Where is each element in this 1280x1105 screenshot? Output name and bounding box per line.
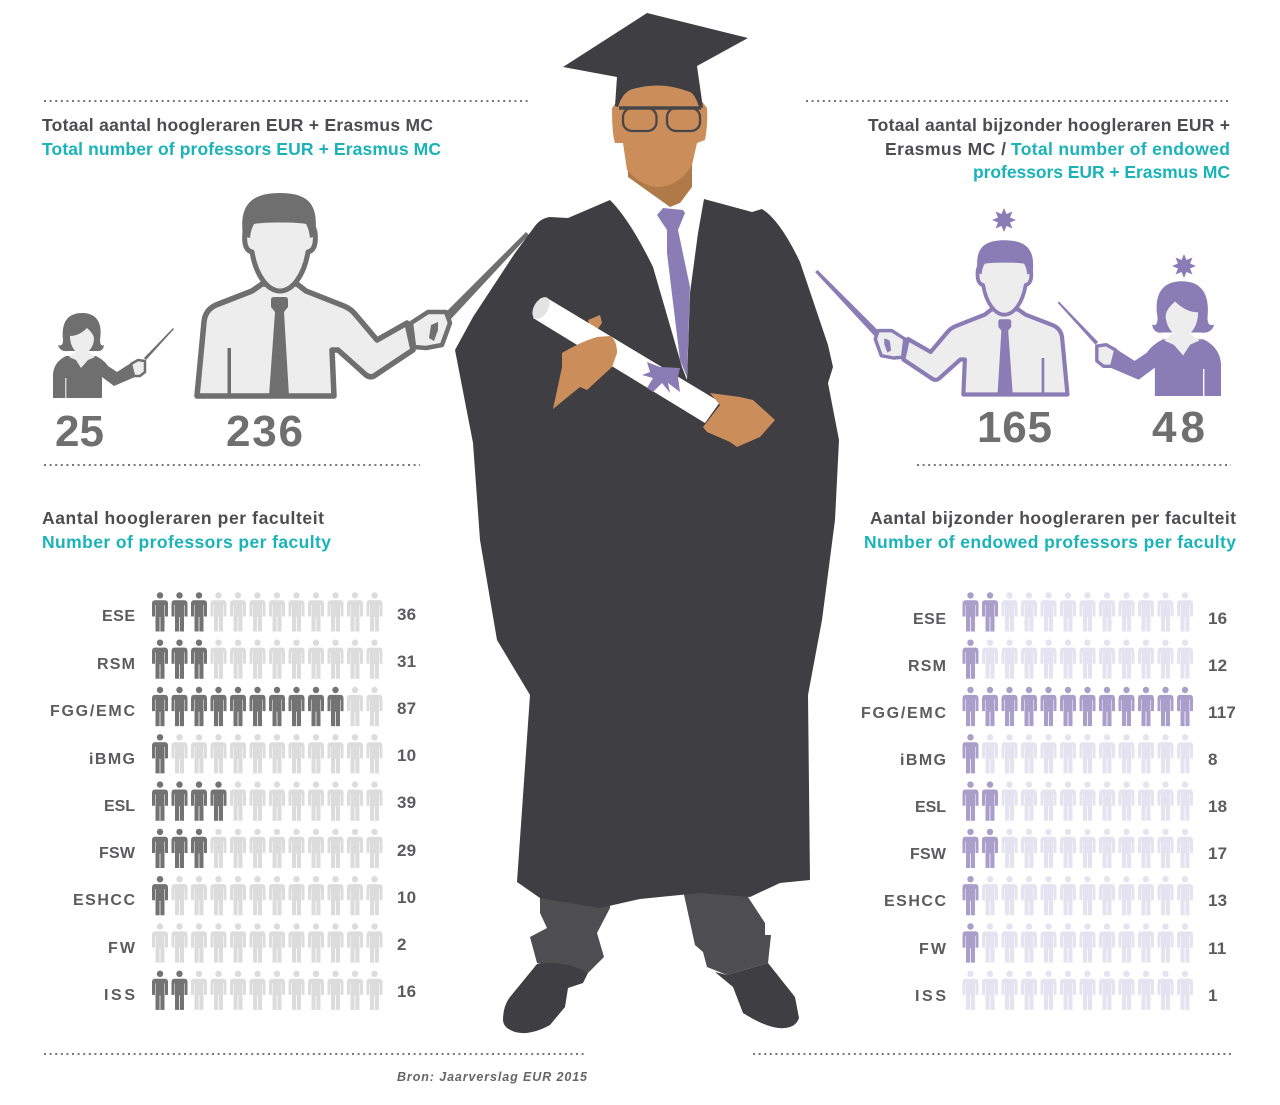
row: ESHCC 10 (73, 876, 416, 915)
row: ESE 16: ESE (913, 611, 946, 628)
row: iBMG 8 (900, 734, 1218, 773)
chart: endowed professors per faculty (861, 592, 1236, 1010)
row: FSW 29: 29 (397, 841, 416, 860)
row: ISS 16: ISS (104, 987, 135, 1004)
row: ISS 1: 1 (1208, 986, 1218, 1005)
row: ESL 39 (104, 781, 416, 821)
row: ESE 36: ESE (102, 608, 135, 625)
row: iBMG 10 (89, 734, 416, 773)
row: ESE 36: 36 (397, 605, 416, 624)
icon: male endowed professor, purple (815, 208, 1067, 394)
number: 236: 236 (226, 407, 303, 456)
row: RSM 12: RSM (908, 658, 946, 675)
row: FSW 17 (910, 829, 1227, 868)
row: FW 11: 11 (1208, 939, 1226, 958)
row: ESHCC 10: ESHCC (73, 892, 135, 909)
heading: endowed professors per faculty (864, 508, 1236, 552)
row: FW 2 (108, 923, 407, 963)
row: FGG/EMC 87: FGG/EMC (50, 703, 135, 720)
icon: female professor, grey (53, 313, 174, 398)
row: ISS 16: 16 (397, 982, 416, 1001)
row: ESE 16: 16 (1208, 609, 1227, 628)
row: ISS 1 (915, 971, 1218, 1010)
heading: endowed professors per faculty: Number of endowed professors per faculty (864, 532, 1236, 552)
row: FSW 17: FSW (910, 846, 947, 863)
mortarboard cap (563, 13, 748, 108)
number: 165: 165 (977, 403, 1052, 452)
shoes (503, 963, 799, 1033)
hands (553, 336, 775, 447)
row: FW 2: FW (108, 940, 136, 957)
row: FGG/EMC 117 (861, 687, 1236, 726)
row: FSW 29: FSW (99, 845, 136, 862)
row: FGG/EMC 87: 87 (397, 699, 416, 718)
row: RSM 12: 12 (1208, 656, 1227, 675)
row: RSM 31: RSM (97, 656, 135, 673)
heading: total endowed professors (868, 115, 1230, 182)
row: ESHCC 10: 10 (397, 888, 416, 907)
row: FGG/EMC 117: FGG/EMC (861, 705, 946, 722)
row: RSM 12 (908, 640, 1227, 679)
tie (657, 208, 690, 377)
row: RSM 31 (97, 640, 416, 679)
row: ESL 39: ESL (104, 798, 135, 815)
row: FW 2: 2 (397, 935, 407, 954)
row: iBMG 8: 8 (1208, 750, 1218, 769)
row: FGG/EMC 117: 117 (1208, 703, 1236, 722)
heading: total endowed professors: professors EUR + Erasmus MC (973, 162, 1230, 182)
heading: total professors: Totaal aantal hoogleraren EUR + Erasmus MC (42, 115, 433, 135)
row: ISS 1: ISS (915, 988, 946, 1005)
trousers (530, 890, 771, 975)
heading: total endowed professors: Erasmus MC / (885, 139, 1006, 159)
ribbon (642, 362, 680, 393)
row: FW 11: FW (919, 941, 947, 958)
left hand fingers (588, 315, 602, 330)
heading: total professors: Total number of professors EUR + Erasmus MC (42, 139, 441, 159)
heading: professors per faculty: Number of professors per faculty (42, 532, 331, 552)
chart: professors per faculty (50, 592, 416, 1010)
row: FW 11 (919, 923, 1226, 963)
row: RSM 31: 31 (397, 652, 416, 671)
number: 48: 48 (1152, 403, 1205, 452)
heading: professors per faculty: Aantal hoogleraren per faculteit (42, 508, 324, 528)
icon: female endowed professor, purple (1058, 254, 1221, 396)
number: 25: 25 (55, 407, 104, 456)
row: ESL 18: ESL (915, 799, 946, 816)
row: iBMG 10: 10 (397, 746, 416, 765)
row: ESHCC 13: ESHCC (884, 893, 946, 910)
heading: total endowed professors: Total number of endowed (1011, 139, 1230, 159)
neck and face (628, 150, 692, 207)
row: ESE 36 (102, 592, 416, 632)
row: ISS 16 (104, 971, 416, 1010)
row: ESHCC 13 (884, 876, 1227, 915)
row: iBMG 8: iBMG (900, 752, 946, 769)
source note: Bron: Jaarverslag EUR 2015 (397, 1070, 588, 1084)
row: FSW 29 (99, 829, 416, 868)
row: ESL 18: 18 (1208, 797, 1227, 816)
heading: professors per faculty (42, 508, 331, 552)
icon: male professor, grey (197, 193, 529, 396)
row: FSW 17: 17 (1208, 844, 1227, 863)
diploma roll (533, 298, 720, 423)
central graduate figure (455, 13, 839, 1033)
row: ESL 18 (915, 781, 1227, 821)
row: FGG/EMC 87 (50, 687, 416, 726)
row: ESHCC 13: 13 (1208, 891, 1227, 910)
row: iBMG 10: iBMG (89, 751, 135, 768)
glasses (619, 108, 701, 131)
heading: total endowed professors: Totaal aantal bijzonder hoogleraren EUR + (868, 115, 1230, 135)
heading: endowed professors per faculty: Aantal bijzonder hoogleraren per faculteit (870, 508, 1236, 528)
row: ESL 39: 39 (397, 793, 416, 812)
gown (455, 199, 839, 908)
row: ESE 16 (913, 592, 1227, 632)
heading: total professors (42, 115, 441, 159)
